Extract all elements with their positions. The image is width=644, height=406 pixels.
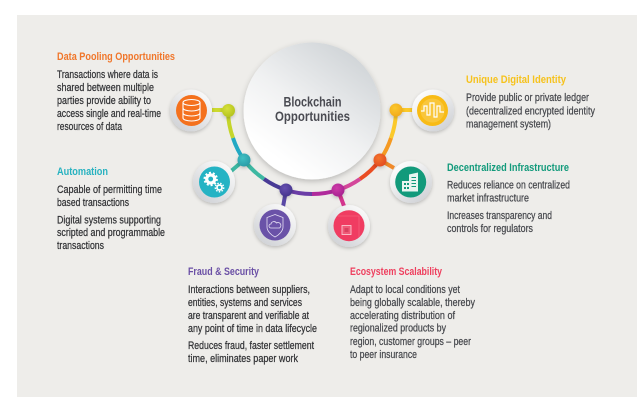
text block: Ecosystem Scalability: to peer insurance [350, 349, 417, 361]
node: lime [222, 104, 235, 117]
text block: Unique Digital Identity [466, 74, 595, 130]
text block: Unique Digital Identity: (decentralized encrypted identity [466, 106, 595, 118]
text block: Automation: Digital systems supporting [57, 214, 161, 226]
text block: Data Pooling Opportunities: Transactions where data is [57, 69, 158, 81]
text block: Decentralized Infrastructure: controls for regulators [447, 223, 533, 235]
text block: Ecosystem Scalability: Ecosystem Scalability [350, 266, 443, 278]
text block: Fraud & Security: entities, systems and services [188, 297, 302, 309]
text block: Data Pooling Opportunities: access single and real-time [57, 108, 161, 120]
central title: Opportunities [275, 108, 350, 124]
text block: Fraud & Security [188, 266, 317, 365]
text block: Data Pooling Opportunities [57, 51, 175, 133]
text block: Automation: Automation [57, 166, 108, 178]
text block: Data Pooling Opportunities: parties provide ability to [57, 95, 151, 107]
text block: Decentralized Infrastructure [447, 162, 570, 235]
text block: Ecosystem Scalability: Adapt to local conditions yet [350, 284, 460, 296]
text block: Automation: Capable of permitting time [57, 184, 162, 196]
text block: Fraud & Security: Interactions between suppliers, [188, 284, 310, 296]
text block: Decentralized Infrastructure: Decentralized Infrastructure [447, 162, 569, 174]
icon: squares [328, 205, 370, 247]
text block: Automation [57, 166, 165, 252]
text block: Fraud & Security: time, eliminates paper work [188, 353, 298, 365]
icon: waveform [412, 90, 454, 132]
central title [275, 94, 350, 124]
icon: database [170, 90, 212, 132]
text block: Unique Digital Identity: Provide public or private ledger [466, 92, 589, 104]
icon: building [390, 161, 432, 203]
text block: Decentralized Infrastructure: Reduces reliance on centralized [447, 180, 570, 192]
text block: Unique Digital Identity: Unique Digital Identity [466, 74, 567, 86]
text block: Data Pooling Opportunities: shared between multiple [57, 82, 154, 94]
node: purple [280, 184, 292, 196]
text block: Decentralized Infrastructure: market infrastructure [447, 192, 529, 204]
icon: shield cloud [254, 204, 296, 246]
connector arc [212, 110, 414, 207]
text block: Ecosystem Scalability: accelerating distribution of [350, 310, 456, 322]
text block: Data Pooling Opportunities: resources of data [57, 121, 123, 133]
text block: Unique Digital Identity: management system) [466, 118, 551, 130]
text block: Ecosystem Scalability: being globally scalable, thereby [350, 297, 475, 309]
text block: Ecosystem Scalability [350, 266, 475, 361]
icon: gears [193, 161, 235, 203]
text block: Fraud & Security: Reduces fraud, faster settlement [188, 340, 314, 352]
central title: Blockchain [284, 94, 342, 110]
text block: Ecosystem Scalability: region, customer groups – peer [350, 336, 471, 348]
central circle [244, 42, 380, 180]
text block: Automation: scripted and programmable [57, 227, 165, 239]
text block: Automation: based transactions [57, 197, 129, 209]
text block: Automation: transactions [57, 240, 104, 252]
text block: Data Pooling Opportunities: Data Pooling Opportunities [57, 51, 175, 63]
text block: Fraud & Security: Fraud & Security [188, 266, 260, 278]
text block: Ecosystem Scalability: regionalized products by [350, 322, 446, 334]
text block: Fraud & Security: are transparent and verifiable at [188, 310, 309, 322]
node: yellow [390, 104, 402, 116]
node: magenta [332, 184, 344, 196]
text block: Decentralized Infrastructure: Increases transparency and [447, 210, 552, 222]
text block: Fraud & Security: any point of time in data lifecycle [188, 323, 317, 335]
node: orange [374, 154, 386, 166]
node: teal [238, 154, 250, 166]
